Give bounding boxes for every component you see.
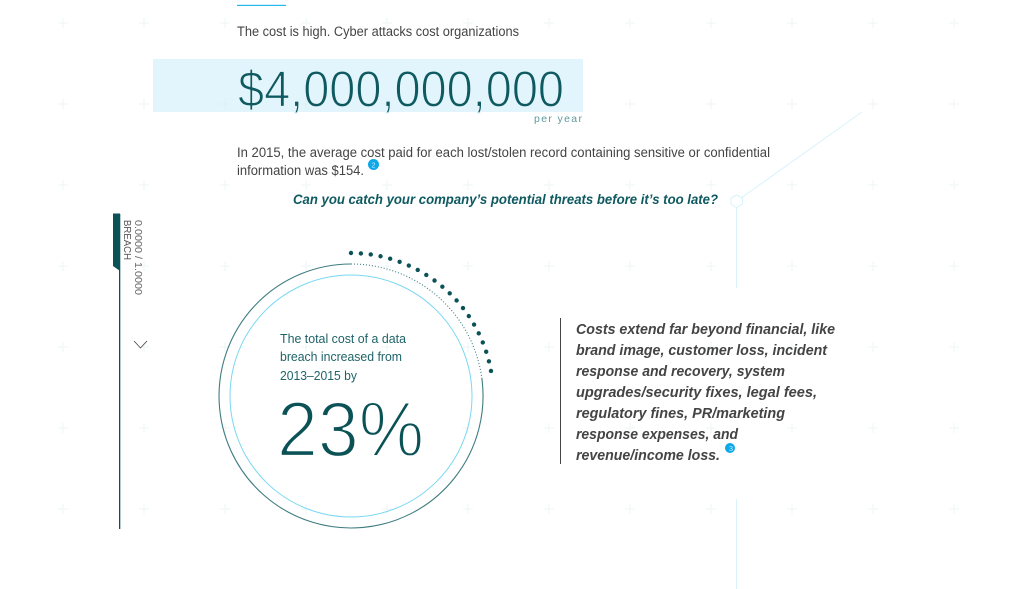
quote divider [560,318,561,464]
question heading: Can you catch your company’s potential threats before it’s too late? [293,192,718,207]
circle caption: breach increased from [280,350,402,364]
progress marker tab [113,214,120,271]
intro text: The cost is high. Cyber attacks cost organizations [237,24,519,39]
progress sidebar [113,214,147,529]
dotted ring segment [351,264,482,378]
costs callout text: upgrades/security fixes, legal fees, [576,385,817,401]
circle caption: The total cost of a data [280,332,406,346]
progress value: 0.0000 / 1.0000 [132,220,144,295]
per year label: per year [534,113,582,125]
costs callout text: response expenses, and [576,427,739,443]
outer ring [219,264,483,528]
costs callout text: revenue/income loss. [576,448,720,464]
dotted progress arc [351,253,491,371]
footnote marker 3 [725,443,735,453]
paragraph: average cost [237,145,770,178]
costs callout text: brand image, customer loss, incident [576,343,828,359]
costs callout text: response and recovery, system [576,364,785,380]
headline figure panel: $4,000,000,000 [238,60,564,118]
costs callout text: Costs extend far beyond financial, like [576,322,835,338]
footnote marker 3: 3 [729,444,733,453]
decorative hexagon connector [731,112,862,288]
paragraph: average cost: In 2015, the average cost paid for each lost/stolen record containing sensitive or confidential [237,145,770,160]
paragraph: average cost: information was $154. [237,163,364,178]
footnote marker 2 [368,159,379,170]
percentage figure: 23% [277,385,424,473]
costs callout text [576,322,835,464]
section name: BREACH [121,220,133,260]
icon: chevron down [134,341,147,348]
lower connector line [736,499,737,589]
decorative accent line at top [237,5,286,6]
inner ring [230,275,472,517]
progress track [119,214,120,529]
costs callout text: regulatory fines, PR/marketing [576,406,785,422]
circle caption: 2013–2015 by [280,369,358,383]
circular statistic [219,253,491,528]
footnote marker 2: 2 [371,160,376,170]
circle caption [280,332,406,383]
